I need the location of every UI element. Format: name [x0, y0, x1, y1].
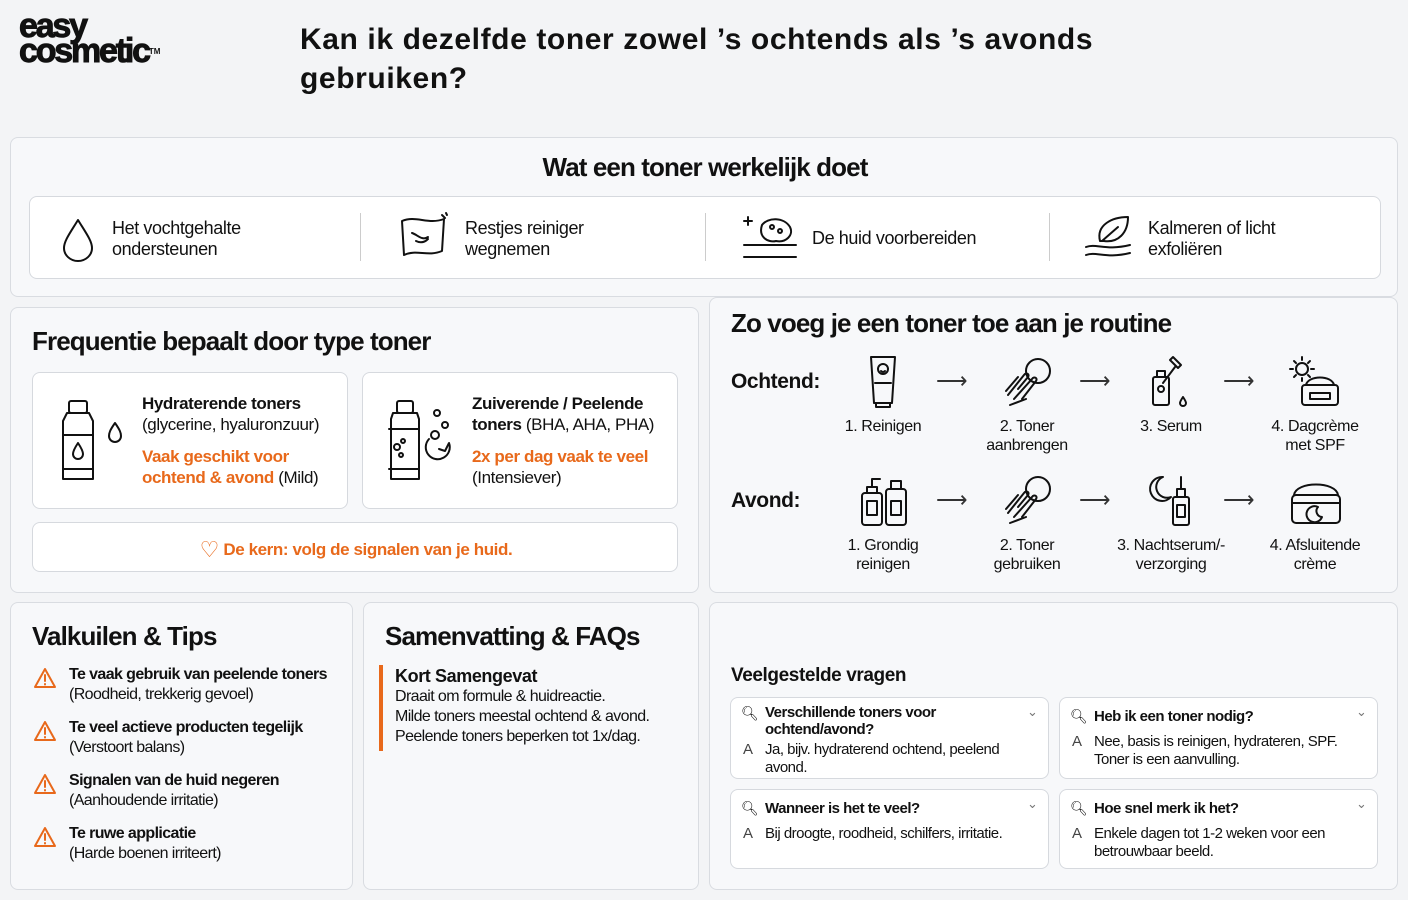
summary block: Peelende toners beperken tot 1x/dag.: [395, 728, 640, 745]
step icons morning: [870, 356, 896, 408]
title: gebruiken?: [300, 62, 468, 95]
faq 2: Heb ik een toner nodig?: [1094, 708, 1253, 725]
panel: routine: crème: [1294, 556, 1336, 573]
summary block: Milde toners meestal ochtend & avond.: [395, 708, 649, 725]
title: Kan ik dezelfde toner zowel ’s ochtends als ’s avonds: [300, 23, 1093, 56]
faq 1: Verschillende toners voor: [765, 704, 936, 721]
faq 1: avond.: [765, 759, 807, 776]
heading: Wat een toner werkelijk doet: [543, 152, 867, 182]
faq 2: 🔍︎: [1070, 708, 1087, 724]
title: [300, 23, 1093, 95]
text: moisture: ondersteunen: [112, 239, 217, 259]
faq 2: [1059, 697, 1378, 779]
faq 3: 🔍︎: [741, 800, 758, 816]
panel: summary: [363, 602, 699, 890]
label: evening: Avond:: [731, 489, 800, 512]
faq 2: A: [1072, 733, 1082, 750]
faq 1: ⌄: [1027, 704, 1038, 719]
text: Hydraterende toners: [142, 394, 301, 413]
card: exfoliating: [362, 372, 678, 509]
tip list: [34, 666, 327, 862]
benefits row: [29, 196, 1381, 279]
logo: [19, 7, 160, 70]
faq 3: Wanneer is het te veel?: [765, 800, 920, 817]
tip list: Te vaak gebruik van peelende toners: [69, 666, 327, 683]
text: [142, 394, 319, 434]
card: exfoliating: toners (BHA, AHA, PHA): [472, 415, 654, 434]
tip list: (Roodheid, trekkerig gevoel): [69, 686, 253, 703]
text: remove residue: wegnemen: [465, 239, 550, 259]
heading: Veelgestelde vragen: [731, 665, 906, 686]
label: morning: Ochtend:: [731, 370, 820, 393]
panel: FAQ: [709, 602, 1398, 890]
faq 3: [730, 789, 1049, 869]
faq 3: Bij droogte, roodheid, schilfers, irritatie.: [765, 825, 1002, 842]
summary block: Kort Samengevat: [395, 666, 537, 686]
faq 4: [1059, 789, 1378, 869]
card: hydrating: Vaak geschikt voor: [142, 447, 289, 466]
panel: routine: verzorging: [1136, 556, 1206, 573]
step labels evening: 1. Grondig: [848, 537, 918, 554]
faq 2: Nee, basis is reinigen, hydrateren, SPF.: [1094, 733, 1337, 750]
faq 3: ⌄: [1027, 796, 1038, 811]
step labels evening: [848, 537, 918, 573]
text: remove residue: [465, 218, 584, 259]
text: calm: exfoliëren: [1148, 239, 1222, 259]
panel: routine: 4. Afsluitende: [1270, 537, 1360, 554]
card: exfoliating: 2x per dag vaak te veel: [472, 447, 648, 466]
panel: pitfalls: [10, 602, 353, 890]
icon: leaf: [1085, 216, 1131, 256]
text: prepare: De huid voorbereiden: [812, 228, 976, 248]
faq 1: 🔍︎: [741, 705, 758, 721]
text: calm: [1148, 218, 1276, 259]
heading: Samenvatting & FAQs: [385, 621, 640, 651]
tip list: Signalen van de huid negeren: [69, 772, 279, 789]
tip list: Te veel actieve producten tegelijk: [69, 719, 303, 736]
step labels evening: reinigen: [856, 556, 910, 573]
heading: Frequentie bepaalt door type toner: [32, 326, 430, 356]
tip list: Te ruwe applicatie: [69, 825, 196, 842]
panel: routine: met SPF: [1285, 437, 1345, 454]
summary block: Draait om formule & huidreactie.: [395, 688, 605, 705]
faq 1: A: [743, 741, 753, 758]
text: calm: Kalmeren of licht: [1148, 218, 1275, 238]
card: hydrating: [32, 372, 348, 509]
tip list: (Aanhoudende irritatie): [69, 792, 218, 809]
text: moisture: Het vochtgehalte: [112, 218, 241, 238]
heading: Valkuilen & Tips: [32, 621, 217, 651]
panel: routine: 3. Serum: [1140, 418, 1202, 435]
logo: cosmeticTM: [19, 32, 160, 70]
callout: key: [32, 522, 678, 572]
tip list: (Verstoort balans): [69, 739, 184, 756]
faq 4: A: [1072, 825, 1082, 842]
step icons evening: [861, 478, 907, 526]
icon: prepare skin: [743, 216, 797, 258]
faq 4: ⌄: [1356, 796, 1366, 811]
panel: routine: 4. Dagcrème: [1271, 418, 1359, 435]
logo: easy: [19, 7, 86, 45]
faq 2: Toner is een aanvulling.: [1094, 751, 1240, 768]
faq 1: [730, 697, 1049, 779]
panel: routine: ⟶: [1079, 487, 1110, 512]
panel: routine: ⟶: [1079, 368, 1110, 393]
panel: routine: 2. Toner: [1000, 537, 1054, 554]
icon: wipe: [401, 212, 448, 256]
card: hydrating: ochtend & avond (Mild): [142, 468, 318, 487]
panel: routine: 3. Nachtserum/-: [1117, 537, 1225, 554]
panel: frequency: [10, 307, 699, 593]
panel: routine: ⟶: [1223, 368, 1254, 393]
text: moisture: [112, 218, 241, 259]
arrows evening: ⟶: [936, 487, 967, 512]
card: exfoliating: Zuiverende / Peelende: [472, 394, 643, 413]
panel: routine: 2. Toner: [1000, 418, 1054, 435]
panel: routine: [709, 297, 1398, 593]
faq 1: Ja, bijv. hydraterend ochtend, peelend: [765, 741, 999, 758]
faq 4: 🔍︎: [1070, 800, 1087, 816]
tip list: (Harde boenen irriteert): [69, 845, 221, 862]
summary block: [379, 665, 689, 751]
text: remove residue: Restjes reiniger: [465, 218, 584, 238]
faq 4: betrouwbaar beeld.: [1094, 843, 1213, 860]
text: (glycerine, hyaluronzuur): [142, 415, 319, 434]
step labels morning: 1. Reinigen: [845, 418, 921, 435]
icon: bottle drop: [62, 400, 122, 480]
icon: bottle bubbles: [388, 400, 451, 480]
icon: water drop: [63, 219, 93, 262]
faq 4: Hoe snel merk ik het?: [1094, 800, 1239, 817]
callout: key: ♡ De kern: volg de signalen van je huid.: [200, 537, 512, 562]
panel: routine: gebruiken: [994, 556, 1060, 573]
arrows morning: ⟶: [936, 368, 967, 393]
faq 3: A: [743, 825, 753, 842]
card: exfoliating: (Intensiever): [472, 468, 561, 487]
heading: Zo voeg je een toner toe aan je routine: [731, 308, 1171, 338]
panel: routine: ⟶: [1223, 487, 1254, 512]
panel: routine: aanbrengen: [986, 437, 1068, 454]
panel: what a toner does: [10, 137, 1398, 297]
faq 2: ⌄: [1356, 704, 1366, 719]
faq 1: ochtend/avond?: [765, 721, 874, 738]
faq 4: Enkele dagen tot 1-2 weken voor een: [1094, 825, 1325, 842]
